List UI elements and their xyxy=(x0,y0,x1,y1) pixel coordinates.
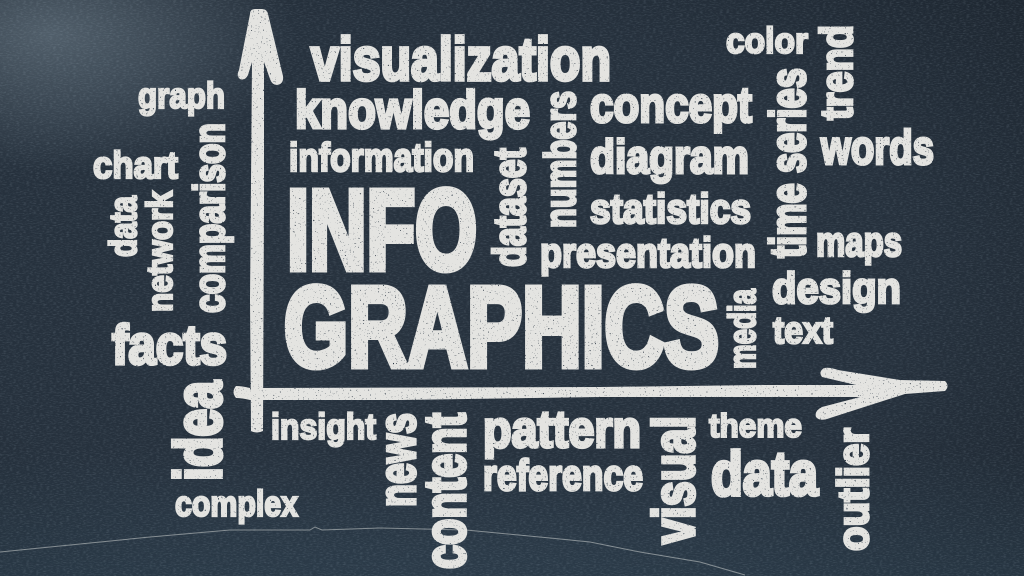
word: maps: maps xyxy=(816,218,902,265)
word: diagram: diagram xyxy=(590,130,749,183)
word: trend: trend xyxy=(811,25,862,120)
word: dataset: dataset xyxy=(484,148,535,267)
word: news: news xyxy=(369,413,427,507)
word: data (left): data xyxy=(103,195,145,257)
arrow: vertical axis xyxy=(238,9,283,432)
word: design: design xyxy=(772,264,901,313)
word: concept: concept xyxy=(590,77,752,133)
word: network: network xyxy=(139,190,180,312)
word: INFO: INFO xyxy=(287,167,477,293)
word: comparison: comparison xyxy=(185,123,234,313)
word: content: content xyxy=(413,413,478,569)
word: chart: chart xyxy=(93,145,178,187)
word: theme: theme xyxy=(709,407,802,444)
word: pattern: pattern xyxy=(483,401,641,459)
word: presentation: presentation xyxy=(540,229,756,276)
word: idea: idea xyxy=(161,380,235,481)
word: visual: visual xyxy=(642,416,707,544)
word: time series: time series xyxy=(760,68,816,258)
word: facts: facts xyxy=(112,313,227,376)
word: outlier: outlier xyxy=(829,428,878,551)
arrow: horizontal axis xyxy=(234,368,948,420)
word: data (large): data xyxy=(711,440,818,509)
word: visualization: visualization xyxy=(311,26,611,93)
word: insight: insight xyxy=(271,406,376,447)
word: knowledge: knowledge xyxy=(295,81,530,140)
word: reference: reference xyxy=(483,451,643,500)
word: information: information xyxy=(289,136,474,180)
word: graph: graph xyxy=(138,75,225,116)
word: words: words xyxy=(820,122,934,175)
word: numbers: numbers xyxy=(536,91,585,228)
word: GRAPHICS: GRAPHICS xyxy=(284,264,719,390)
word: color: color xyxy=(726,20,808,61)
word: text: text xyxy=(773,310,833,352)
word: media: media xyxy=(722,288,764,369)
crack in the board xyxy=(0,527,745,575)
word: complex: complex xyxy=(175,483,298,524)
word: statistics: statistics xyxy=(590,185,751,232)
